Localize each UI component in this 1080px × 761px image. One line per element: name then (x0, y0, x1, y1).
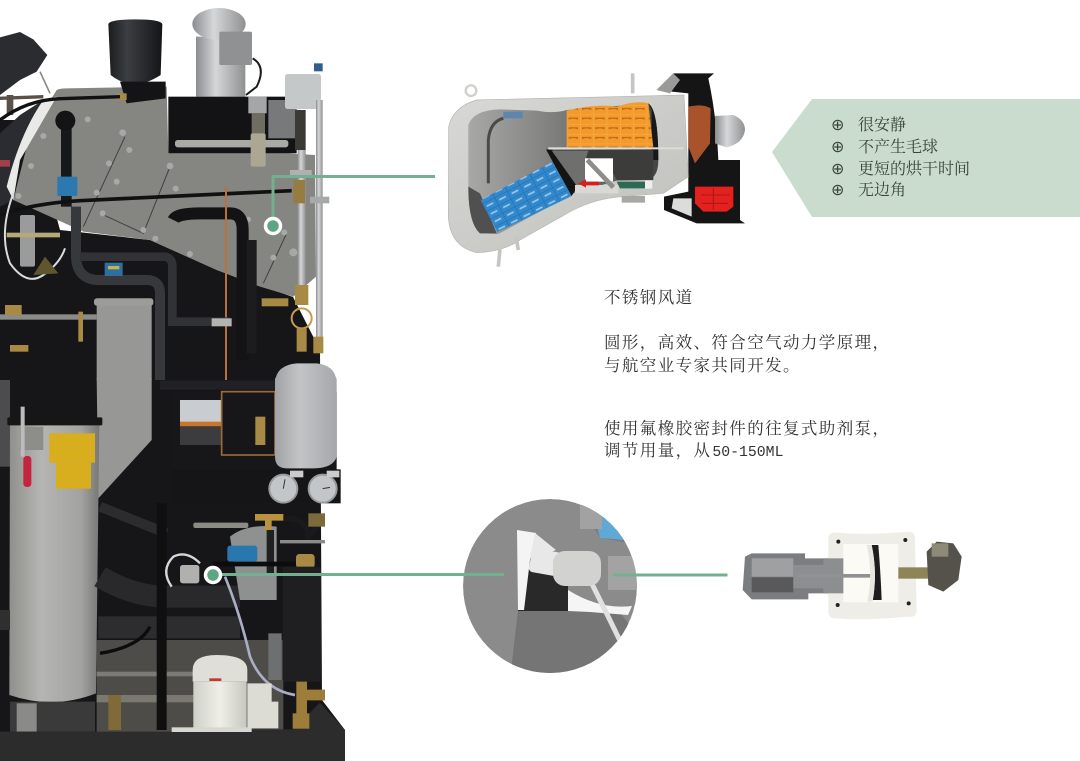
brass valve group (295, 285, 308, 305)
pump cutaway component (743, 532, 962, 619)
marker: duct (266, 218, 280, 234)
brass valve (898, 567, 932, 579)
item: short drying time: ⊕ (831, 159, 844, 178)
heading: stainless steel duct: 不锈钢风道 (604, 288, 694, 307)
text: duct description: 圆形，高效、符合空气动力学原理， (604, 333, 890, 352)
item: no lint: ⊕ (831, 137, 844, 156)
gauge manifold (172, 469, 341, 503)
item: no corners: ⊕ (831, 180, 844, 199)
fan housing (657, 73, 745, 223)
item: no corners (831, 180, 906, 199)
red filter block (695, 187, 733, 212)
black cup (108, 19, 162, 84)
pump grey cylinder (743, 553, 830, 599)
filter regulator (20, 215, 35, 267)
white motor (193, 655, 247, 682)
upper machine section (0, 8, 337, 382)
text: duct description (604, 333, 890, 375)
receiver tank (275, 378, 337, 468)
text: duct description: 与航空业专家共同开发。 (604, 356, 801, 375)
white housing (828, 532, 917, 619)
orange filter block (567, 102, 653, 147)
pressure switch and pipes (285, 74, 321, 109)
brass left (108, 695, 121, 730)
base tray (0, 703, 345, 761)
duct top (97, 298, 152, 380)
receiver tank dome (275, 363, 337, 382)
text: dosing pump description: 调节用量，从50-150ML (604, 441, 783, 461)
lower floor (97, 640, 283, 733)
rubber pipes (76, 207, 160, 380)
transparent hose (225, 577, 295, 695)
vertical post (157, 503, 167, 730)
brass fittings (255, 517, 283, 532)
filter cylinder (9, 423, 99, 702)
fan motor (715, 115, 745, 147)
callout line: pump (214, 573, 504, 576)
grey panel (13, 87, 316, 297)
item: quiet (831, 115, 906, 134)
item: short drying time: 更短的烘干时间 (858, 161, 970, 178)
stainless steel air duct cutaway (448, 73, 745, 267)
black column (283, 567, 321, 682)
marker: pump (206, 568, 220, 582)
machine photo: dry-cleaning machine interior (0, 8, 435, 761)
feature list (831, 115, 970, 199)
item: quiet: ⊕ (831, 115, 844, 134)
duct shell (448, 95, 688, 253)
dark machine body (0, 120, 345, 761)
black box with valve (168, 97, 297, 153)
callout line: duct (273, 176, 435, 226)
item: no lint: 不产生毛球 (858, 139, 938, 156)
red arrow (578, 179, 599, 188)
pump on machine (180, 565, 199, 583)
black hose and blue box (61, 117, 72, 207)
brass outlet (302, 682, 325, 727)
detail circle connector line (613, 574, 728, 576)
blue filter block (481, 162, 572, 232)
motor (196, 37, 245, 97)
white tube (5, 193, 65, 279)
text: dosing pump description (604, 419, 890, 461)
hoses (100, 577, 240, 597)
window and damper (585, 158, 613, 182)
left rail and brass (0, 314, 97, 320)
item: quiet: 很安静 (858, 117, 906, 134)
perforated drum (230, 526, 277, 600)
item: no corners: 无边角 (858, 182, 906, 199)
detail circle of pump (463, 495, 640, 680)
duct cavity (468, 103, 658, 234)
compressor (172, 392, 337, 470)
left bellows (0, 380, 10, 467)
feature arrow panel (772, 99, 1080, 217)
lower machine section (0, 378, 345, 761)
top-left black unit (0, 32, 47, 95)
text: dosing pump description: 使用氟橡胶密封件的往复式助剂泵， (604, 419, 890, 438)
item: no lint (831, 137, 938, 156)
filter duct bend (97, 378, 152, 498)
fan interior (688, 105, 711, 163)
